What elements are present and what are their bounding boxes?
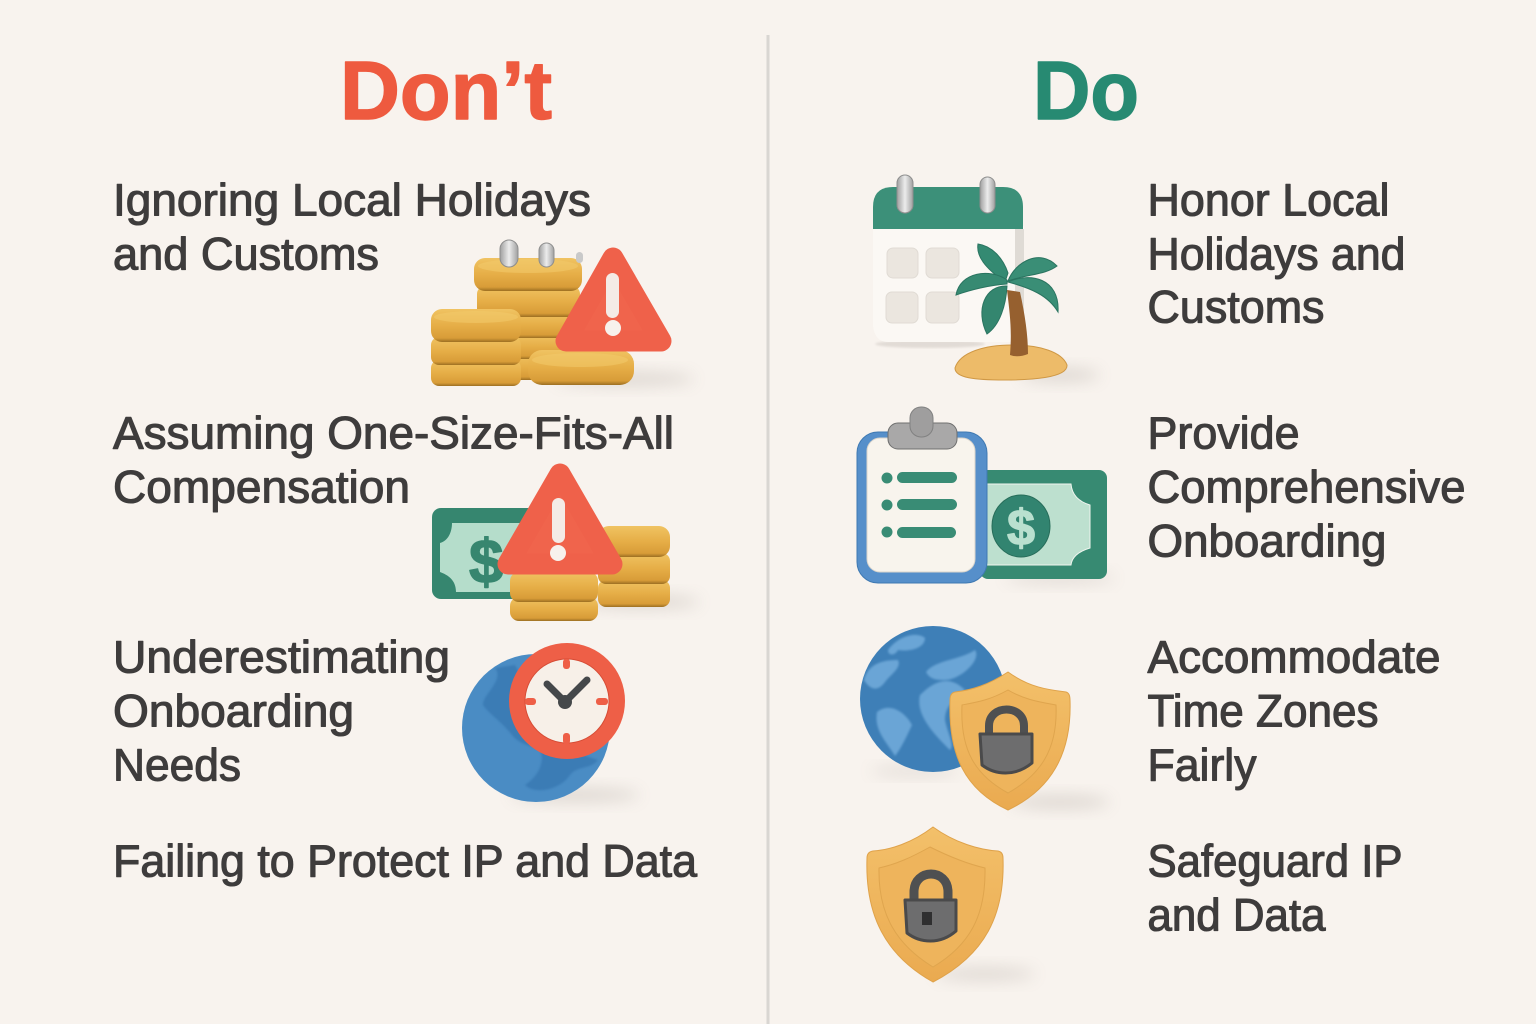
icon: globe with clock: [462, 643, 640, 802]
text: provide comprehensive onboarding: Comprehensive: [1148, 462, 1466, 512]
heading: Do: Do: [1033, 44, 1139, 137]
text: honor local holidays and customs: [1148, 174, 1406, 332]
text: accommodate time zones fairly: Time Zones: [1148, 686, 1378, 736]
icon: clipboard and banknote: $: [1007, 500, 1035, 556]
icon: banknote, coins and warning triangle: [432, 474, 700, 621]
text: underestimating onboarding needs: [113, 632, 450, 790]
text: provide comprehensive onboarding: [1148, 408, 1466, 566]
text: accommodate time zones fairly: Fairly: [1148, 740, 1257, 790]
text: ignoring local holidays and customs: [113, 174, 591, 280]
text: assuming one-size-fits-all compensation: Assuming One-Size-Fits-All: [113, 408, 674, 458]
text: safeguard IP and data: Safeguard IP: [1148, 836, 1402, 886]
text: underestimating onboarding needs: Onboarding: [113, 686, 354, 736]
icon: banknote, coins and warning triangle: $: [469, 528, 503, 597]
icon: shield with padlock: [867, 827, 1035, 982]
panel: do column: [857, 44, 1466, 982]
text: ignoring local holidays and customs: and Customs: [113, 228, 379, 280]
text: underestimating onboarding needs: Underestimating: [113, 632, 450, 682]
text: safeguard IP and data: and Data: [1148, 890, 1326, 940]
text: failing to protect IP and data: Failing to Protect IP and Data: [113, 836, 698, 886]
text: underestimating onboarding needs: Needs: [113, 740, 241, 790]
icon: calendar with palm tree: [873, 175, 1100, 381]
text: safeguard IP and data: [1148, 836, 1402, 940]
text: assuming one-size-fits-all compensation: [113, 408, 674, 512]
text: honor local holidays and customs: Holidays and: [1148, 228, 1406, 280]
icon: coin stacks with warning triangle: [431, 240, 695, 386]
heading: Don't: Don’t: [340, 44, 552, 137]
text: accommodate time zones fairly: [1148, 632, 1440, 790]
text: honor local holidays and customs: Honor Local: [1148, 174, 1390, 226]
text: accommodate time zones fairly: Accommodate: [1148, 632, 1440, 682]
icon: globe and shield with padlock: [860, 626, 1110, 810]
text: ignoring local holidays and customs: Ignoring Local Holidays: [113, 174, 591, 226]
text: provide comprehensive onboarding: Onboarding: [1148, 516, 1386, 566]
panel: don't column: [113, 44, 700, 886]
text: provide comprehensive onboarding: Provide: [1148, 408, 1300, 458]
text: honor local holidays and customs: Customs: [1148, 282, 1324, 332]
icon: clipboard and banknote: [857, 407, 1115, 583]
text: assuming one-size-fits-all compensation: Compensation: [113, 462, 410, 512]
